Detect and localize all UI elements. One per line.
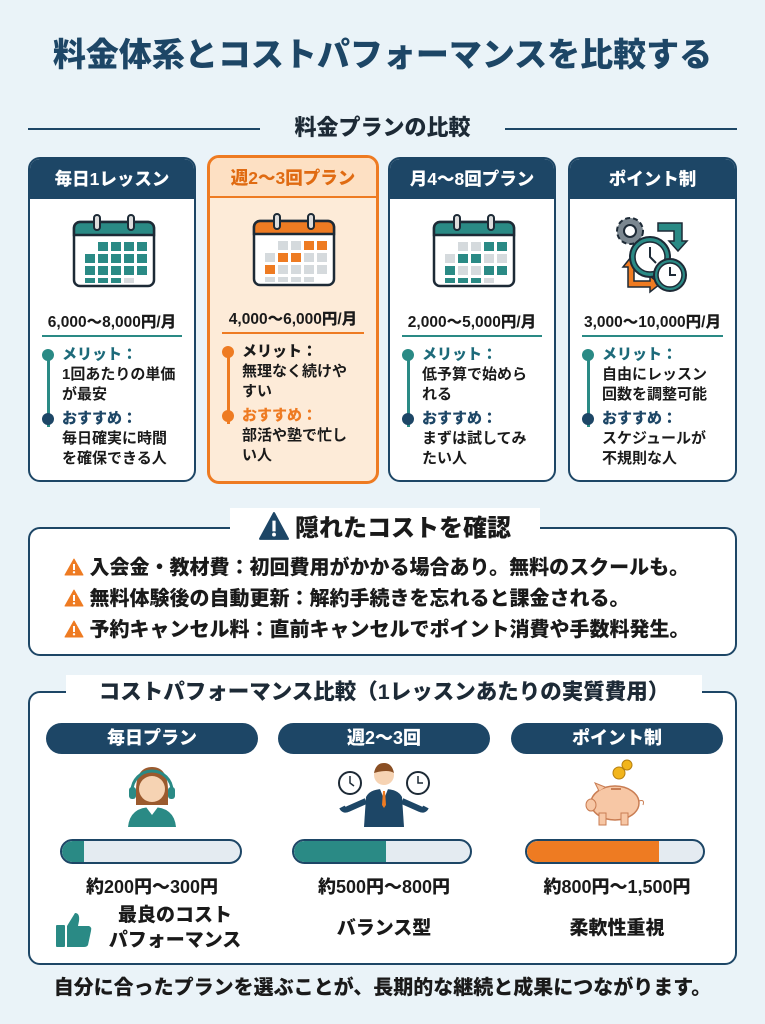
list: hidden costs: 入会金・教材費：初回費用がかかる場合あり。無料のスクールも。 [90, 557, 689, 579]
list: hidden costs: 予約キャンセル料：直前キャンセルでポイント消費や手数料発生。 [90, 619, 690, 641]
label: flexibility: 柔軟性重視 [569, 918, 664, 939]
icon: woman headset [128, 767, 176, 827]
panel: plan daily [28, 157, 196, 482]
heading: cost performance [66, 675, 702, 709]
price: 6,000〜8,000円/月 [48, 314, 176, 331]
merits: 自由にレッスン [602, 366, 707, 383]
column: daily: 約200円〜300円 [86, 877, 218, 897]
merits: 1回あたりの単価 [62, 366, 175, 383]
list: hidden costs: 無料体験後の自動更新：解約手続きを忘れると課金される。 [90, 588, 630, 610]
header: 毎日1レッスン [55, 169, 169, 189]
label: best value: パフォーマンス [109, 930, 241, 951]
panel: cost performance [28, 691, 737, 965]
icon: calendar full [72, 214, 156, 288]
column: weekly [278, 723, 490, 939]
bar [525, 839, 705, 864]
label: best value [56, 904, 241, 951]
merits: スケジュールが [602, 430, 706, 447]
merits: まずは試してみ [422, 430, 527, 447]
merits [42, 346, 175, 467]
section heading: plans: 料金プランの比較 [294, 115, 470, 140]
panel: plan 4-8 per month [388, 157, 556, 482]
merits: たい人 [422, 450, 467, 467]
merits: メリット： [62, 346, 137, 363]
merits: おすすめ： [602, 410, 677, 427]
merits: メリット： [422, 346, 497, 363]
merits [582, 346, 707, 467]
merits: を確保できる人 [62, 450, 167, 467]
list: hidden costs [64, 556, 690, 641]
icon: gear clocks arrows [616, 217, 689, 294]
merits: 部活や塾で忙し [242, 427, 347, 444]
merits: 低予算で始めら [422, 366, 527, 383]
merits: 無理なく続けや [242, 363, 347, 380]
header [30, 159, 194, 199]
merits: 毎日確実に時間 [62, 430, 167, 447]
merits: が最安 [62, 386, 107, 403]
header: 月4〜8回プラン [410, 169, 534, 189]
merits: 回数を調整可能 [602, 386, 707, 403]
price: 3,000〜10,000円/月 [584, 314, 721, 331]
header [390, 159, 554, 199]
footer message: 自分に合ったプランを選ぶことが、長期的な継続と成果につながります。 [54, 977, 711, 999]
panel: hidden costs [28, 527, 737, 656]
merits: おすすめ： [422, 410, 497, 427]
merits: れる [422, 386, 452, 403]
heading: hidden costs [230, 508, 540, 546]
merits: メリット： [242, 343, 317, 360]
icon: calendar partial [432, 214, 516, 288]
icon: calendar orange [252, 213, 336, 286]
column: daily [46, 723, 258, 951]
merits: おすすめ： [242, 407, 317, 424]
merits: おすすめ： [62, 410, 137, 427]
header [210, 158, 376, 198]
label: balance: バランス型 [337, 918, 431, 939]
merits: すい [242, 383, 272, 400]
column: points [511, 723, 723, 939]
header: ポイント制 [609, 169, 696, 189]
price: 2,000〜5,000円/月 [408, 314, 536, 331]
merits [402, 346, 527, 467]
merits: メリット： [602, 346, 677, 363]
title: 料金体系とコストパフォーマンスを比較する [53, 36, 712, 73]
panel: point plan [568, 157, 737, 482]
merits: 不規則な人 [602, 450, 677, 467]
heading: cost performance: コストパフォーマンス比較（1レッスンあたりの実質費用） [99, 680, 669, 704]
icon: piggy bank [586, 760, 644, 826]
bar [60, 839, 242, 864]
price: 4,000〜6,000円/月 [229, 311, 357, 328]
merits [222, 343, 347, 464]
column: weekly: 週2〜3回 [347, 728, 421, 748]
label: best value: 最良のコスト [118, 905, 232, 926]
bar [292, 839, 472, 864]
column: weekly: 約500円〜800円 [318, 877, 450, 897]
header [570, 159, 735, 199]
column: points: ポイント制 [572, 728, 662, 748]
heading: hidden costs: 隠れたコストを確認 [295, 515, 511, 542]
merits: い人 [242, 447, 272, 464]
panel: plan 2-3 per week [207, 155, 379, 484]
column: points: 約800円〜1,500円 [543, 877, 691, 897]
column: daily: 毎日プラン [107, 728, 197, 748]
icon: man with clocks [338, 763, 430, 827]
header: 週2〜3回プラン [231, 168, 355, 188]
